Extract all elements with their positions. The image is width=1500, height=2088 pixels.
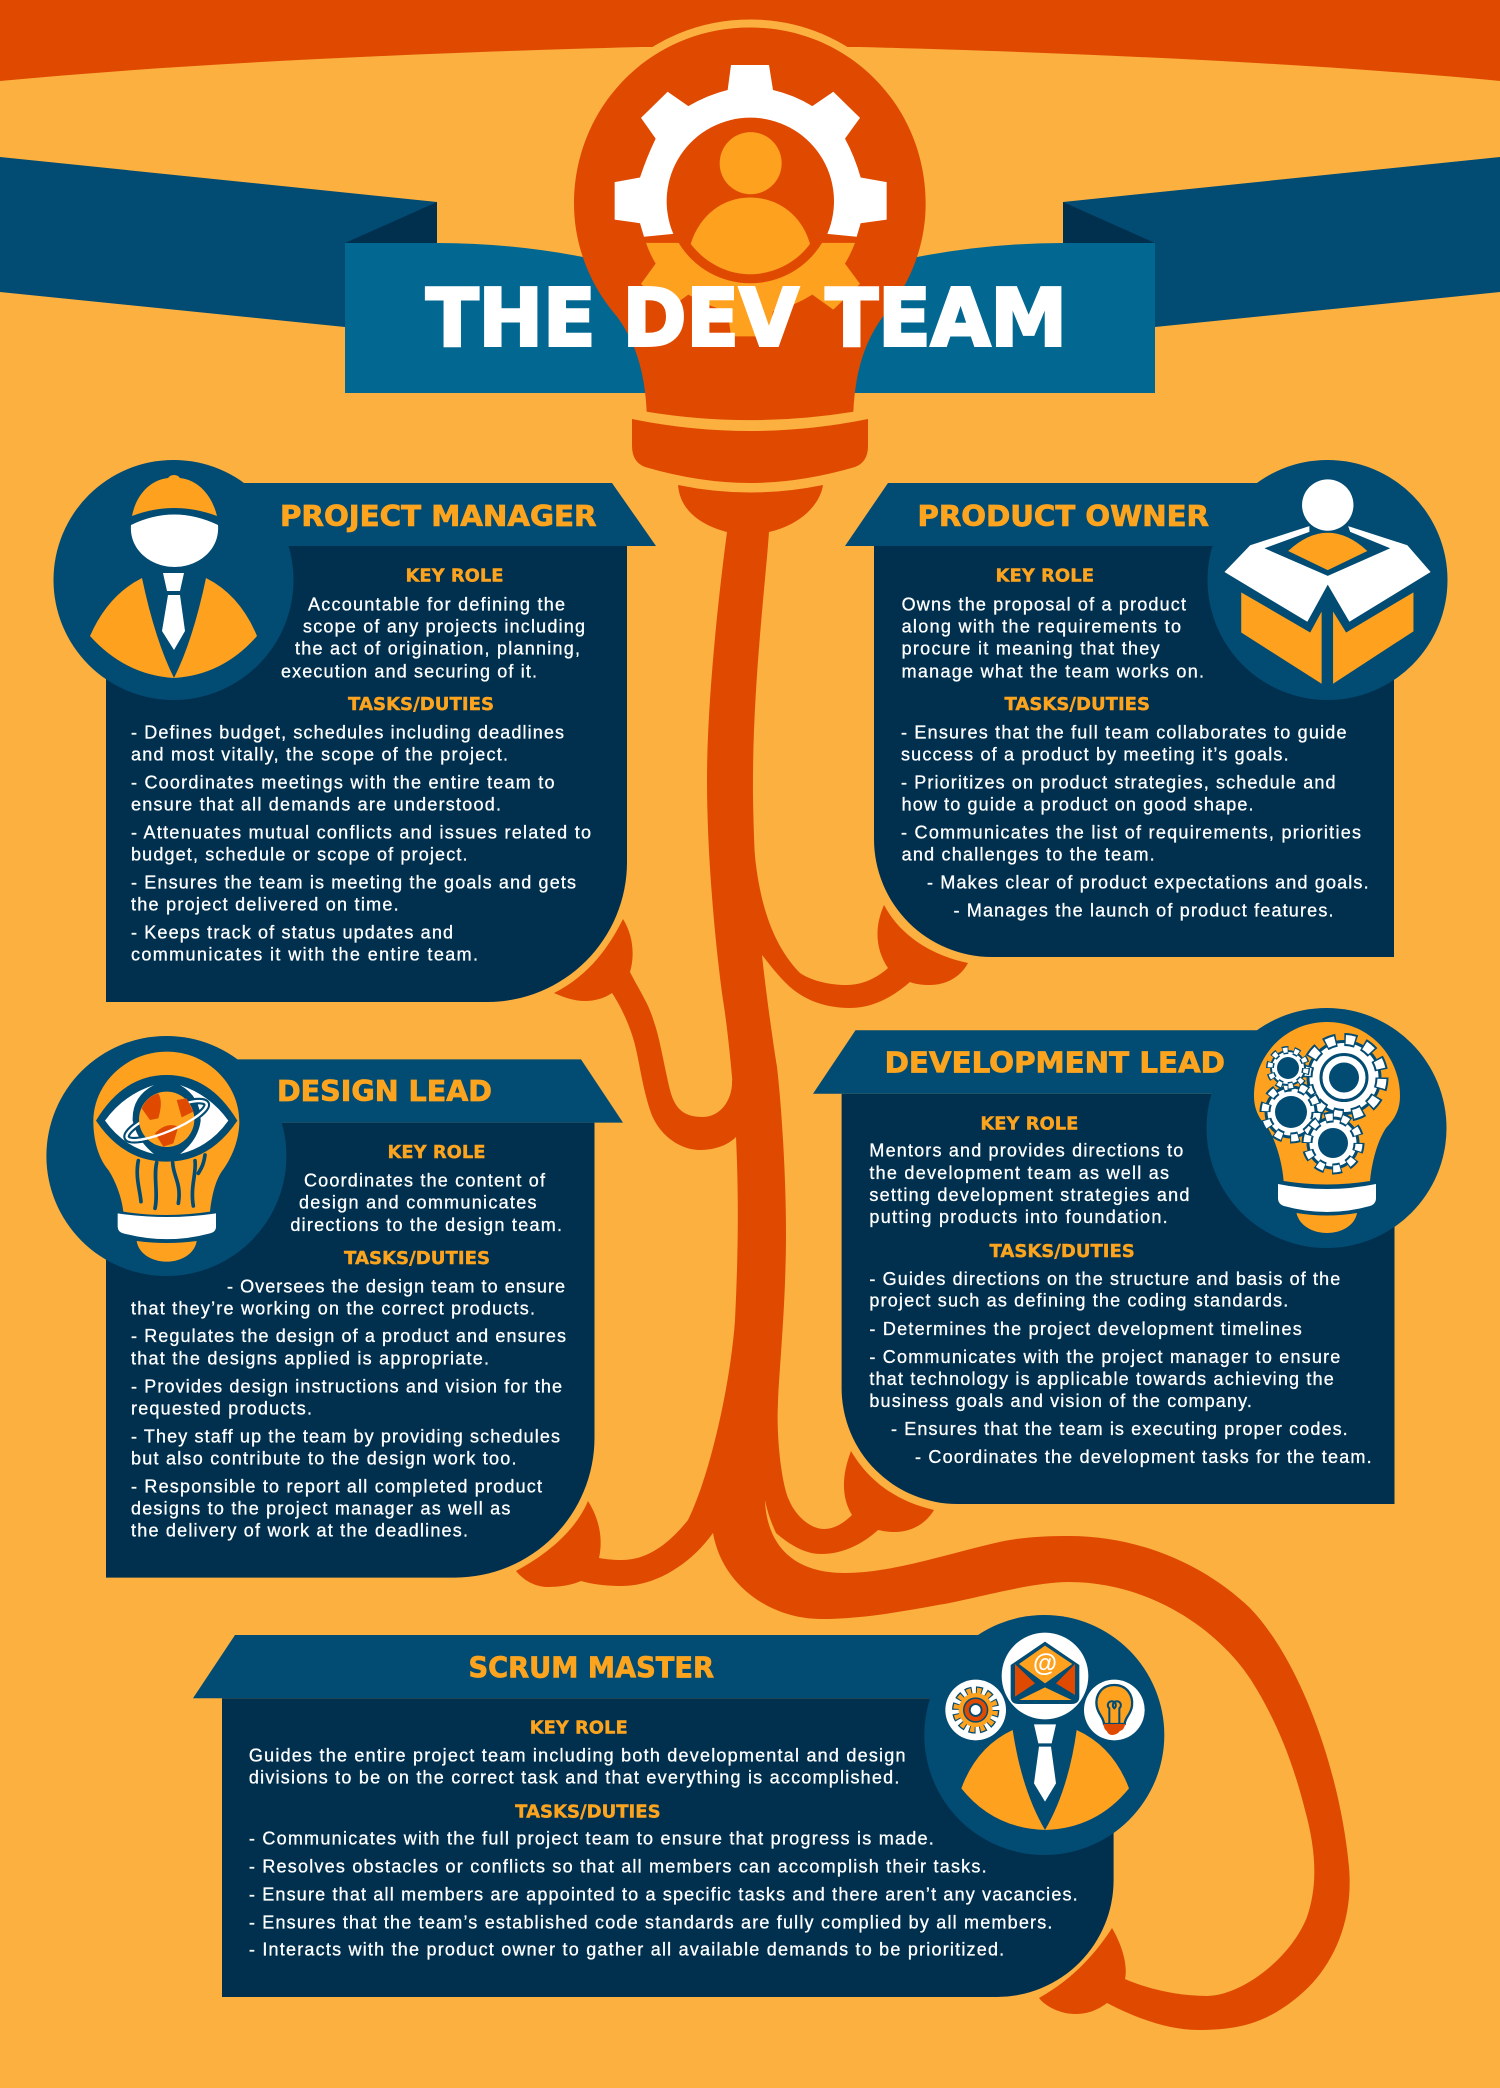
icon: scrum master [924, 1615, 1164, 1855]
key role text: Guides the entire project team including both developmental and design [249, 1746, 905, 1766]
envelope front [1019, 1687, 1072, 1700]
tasks list: success of a product by meeting it’s goals. [901, 744, 1289, 764]
tasks list: business goals and vision of the company. [869, 1391, 1252, 1411]
key role text [249, 1746, 905, 1787]
tasks list: - Provides design instructions and vision for the [131, 1376, 562, 1396]
icon disc [1206, 1008, 1446, 1248]
tasks list: - Attenuates mutual conflicts and issues related to [131, 822, 591, 842]
heading: PRODUCT OWNER [918, 500, 1209, 533]
tasks list: - Regulates the design of a product and ensures [131, 1326, 566, 1346]
tasks list [869, 1269, 1372, 1467]
suit [90, 578, 257, 678]
panel: development lead [813, 1008, 1446, 1504]
gear upper part [615, 65, 887, 237]
panel body [106, 1123, 594, 1578]
gear lower part [641, 243, 860, 336]
tasks list: - Communicates with the project manager to ensure [869, 1347, 1340, 1367]
bulb [93, 1052, 239, 1215]
tasks list: - They staff up the team by providing schedules [131, 1426, 560, 1446]
panel body [842, 1094, 1394, 1504]
banner [193, 1635, 1045, 1698]
key role text: putting products into foundation. [869, 1207, 1168, 1227]
tasks list: project such as defining the coding standards. [869, 1290, 1288, 1310]
tasks list: - Responsible to report all completed product [131, 1476, 542, 1496]
person body [691, 197, 810, 274]
drips [137, 1155, 205, 1208]
key role heading: KEY ROLE [388, 1142, 486, 1163]
head [131, 514, 218, 567]
key role text: execution and securing of it. [281, 661, 537, 681]
tasks list: - Ensures the team is meeting the goals and gets [131, 872, 576, 892]
tasks list: - Oversees the design team to ensure [227, 1276, 565, 1296]
banner [220, 1059, 623, 1123]
key role text [281, 594, 585, 681]
icon disc [1208, 460, 1448, 700]
bulb cap [137, 1241, 197, 1262]
icon: person in box [1208, 460, 1448, 700]
icon: bulb with eye [46, 1036, 286, 1276]
key role heading: KEY ROLE [980, 1114, 1078, 1134]
key role text: along with the requirements to [902, 616, 1181, 636]
tasks list: the delivery of work at the deadlines. [131, 1520, 468, 1540]
envelope sides [1015, 1664, 1075, 1697]
panel: product owner [845, 460, 1448, 957]
envelope flap [1019, 1646, 1072, 1683]
gear small [1270, 1050, 1306, 1086]
key role text: directions to the design team. [290, 1215, 562, 1235]
planet continents [142, 1093, 193, 1147]
tasks list: - Ensures that the team’s established code standards are fully complied by all members. [249, 1912, 1052, 1932]
banner [230, 483, 656, 546]
tasks list: - Ensures that the full team collaborates to guide [901, 722, 1346, 742]
banner [813, 1030, 1330, 1094]
icon disc [54, 460, 294, 700]
tasks list: - Manages the launch of product features. [954, 900, 1334, 920]
planet ring front [127, 1104, 211, 1147]
eye outline [96, 1075, 237, 1162]
key role text: Coordinates the content of [304, 1170, 546, 1190]
tasks list: that technology is applicable towards achieving the [869, 1369, 1334, 1389]
tasks list: how to guide a product on good shape. [902, 794, 1254, 814]
at sign: @ [1033, 1650, 1057, 1677]
tasks list: budget, schedule or scope of project. [131, 845, 468, 865]
heading: DESIGN LEAD [277, 1075, 492, 1108]
key role text [869, 1141, 1189, 1227]
panel body [874, 546, 1394, 957]
person head [720, 132, 782, 194]
tasks list [249, 1828, 1078, 1960]
tasks list: - Keeps track of status updates and [131, 922, 453, 942]
tasks list [901, 722, 1369, 920]
bulb base [632, 419, 868, 483]
tasks list: - Ensures that the team is executing proper codes. [891, 1419, 1348, 1439]
tasks heading: TASKS/DUTIES [990, 1241, 1135, 1262]
icon disc [46, 1036, 286, 1276]
tasks heading: TASKS/DUTIES [515, 1802, 661, 1823]
tasks heading: TASKS/DUTIES [1004, 694, 1150, 715]
planet ring back highlight [123, 1094, 211, 1147]
key role text: Accountable for defining the [308, 594, 565, 614]
head [1302, 479, 1353, 531]
ribbon right tail [1063, 157, 1500, 327]
tasks list: but also contribute to the design work too. [131, 1448, 516, 1468]
box flaps [1224, 526, 1431, 622]
tasks list: - Communicates with the full project team to ensure that progress is made. [249, 1828, 934, 1848]
tasks list: communicates it with the entire team. [131, 944, 478, 964]
gear medium left [1265, 1086, 1317, 1138]
panel: design lead [46, 1036, 623, 1578]
ribbon right fold [1063, 202, 1155, 243]
panel: scrum master [193, 1615, 1164, 1997]
banner [845, 483, 1330, 546]
tasks list: that the designs applied is appropriate. [131, 1348, 489, 1368]
tasks list: - Coordinates the development tasks for the team. [915, 1447, 1372, 1467]
gear medium bottom [1307, 1117, 1359, 1169]
central light bulb [574, 27, 926, 532]
bulb band [1278, 1184, 1376, 1212]
icon disc [924, 1615, 1164, 1855]
heading: SCRUM MASTER [468, 1651, 714, 1684]
branch to development lead [760, 1400, 934, 1554]
key role heading: KEY ROLE [406, 566, 504, 587]
planet [139, 1092, 194, 1147]
envelope body [1011, 1642, 1079, 1704]
key role text: procure it meaning that they [902, 639, 1160, 659]
branch to product owner [745, 830, 968, 1008]
tasks list: designs to the project manager as well as [131, 1498, 510, 1518]
key role text: Owns the proposal of a product [902, 594, 1186, 614]
tasks list: - Interacts with the product owner to gather all available demands to be prioritized. [249, 1940, 1004, 1960]
tasks list: - Resolves obstacles or conflicts so that all members can accomplish their tasks. [249, 1856, 987, 1876]
panel body [222, 1698, 1114, 1997]
trunk with design lead leaf [516, 532, 786, 1587]
tie [1034, 1724, 1056, 1802]
bulb band [118, 1213, 216, 1239]
gear circle [945, 1680, 1006, 1740]
bulb cap [678, 485, 823, 532]
tasks list: - Guides directions on the structure and basis of the [869, 1269, 1340, 1289]
key role heading: KEY ROLE [530, 1718, 628, 1739]
tasks list: ensure that all demands are understood. [131, 794, 501, 814]
key role text [902, 594, 1204, 681]
tail to scrum master [713, 1480, 1350, 2030]
title: THE DEV TEAM [426, 272, 1067, 364]
gear large [1306, 1040, 1382, 1116]
tie [162, 573, 185, 650]
bulb halo [574, 27, 926, 420]
heading: DEVELOPMENT LEAD [885, 1046, 1225, 1079]
mail circle [1002, 1633, 1088, 1719]
branch to project manager [554, 919, 745, 1150]
tasks heading: TASKS/DUTIES [344, 1248, 490, 1269]
icon: manager [54, 460, 294, 700]
tasks list: - Prioritizes on product strategies, schedule and [901, 772, 1336, 792]
top orange band [0, 0, 1500, 81]
hard hat [132, 475, 217, 516]
key role text: design and communicates [299, 1192, 536, 1212]
bulb circle [1084, 1680, 1145, 1740]
panel: project manager [54, 460, 656, 1002]
tasks heading: TASKS/DUTIES [348, 694, 494, 715]
tasks list [131, 722, 591, 964]
tasks list [131, 1276, 566, 1540]
tasks list: that they’re working on the correct products. [131, 1298, 535, 1318]
key role text: the development team as well as [869, 1163, 1169, 1183]
eye white [105, 1085, 228, 1154]
icon: bulb with gears [1206, 1008, 1446, 1248]
bulb [1254, 1022, 1400, 1184]
panel body [106, 546, 627, 1002]
tasks list: - Determines the project development timelines [869, 1319, 1302, 1339]
planet ring back [123, 1094, 211, 1147]
key role text: Mentors and provides directions to [869, 1141, 1183, 1161]
tasks list: the project delivered on time. [131, 894, 399, 914]
bulb cap [1296, 1213, 1357, 1233]
key role text: scope of any projects including [303, 616, 585, 636]
tasks list: - Defines budget, schedules including deadlines [131, 722, 564, 742]
tasks list: and challenges to the team. [902, 845, 1155, 865]
tasks list: - Communicates the list of requirements, priorities [901, 822, 1361, 842]
suit [961, 1730, 1129, 1830]
heading: PROJECT MANAGER [280, 500, 597, 533]
key role heading: KEY ROLE [996, 566, 1094, 587]
box sides [1241, 592, 1413, 684]
tasks list: - Coordinates meetings with the entire team to [131, 772, 554, 792]
key role text: the act of origination, planning, [295, 639, 580, 659]
torso [1288, 533, 1367, 570]
key role text: setting development strategies and [869, 1185, 1189, 1205]
key role text: divisions to be on the correct task and that everything is accomplished. [249, 1767, 899, 1787]
tasks list: requested products. [131, 1399, 312, 1419]
key role text: manage what the team works on. [902, 661, 1204, 681]
title ribbon [0, 157, 1500, 393]
root system [516, 532, 1350, 2030]
tasks list: - Makes clear of product expectations and goals. [927, 872, 1369, 892]
ribbon left tail [0, 157, 437, 327]
icon: gear with person [615, 65, 887, 336]
ribbon centre [345, 243, 1155, 393]
ribbon left fold [345, 202, 437, 243]
bulb glass [574, 27, 926, 420]
tasks list: - Ensure that all members are appointed to a specific tasks and there aren’t any vacancies. [249, 1884, 1078, 1904]
key role text [290, 1170, 562, 1235]
tasks list: and most vitally, the scope of the project. [131, 744, 508, 764]
